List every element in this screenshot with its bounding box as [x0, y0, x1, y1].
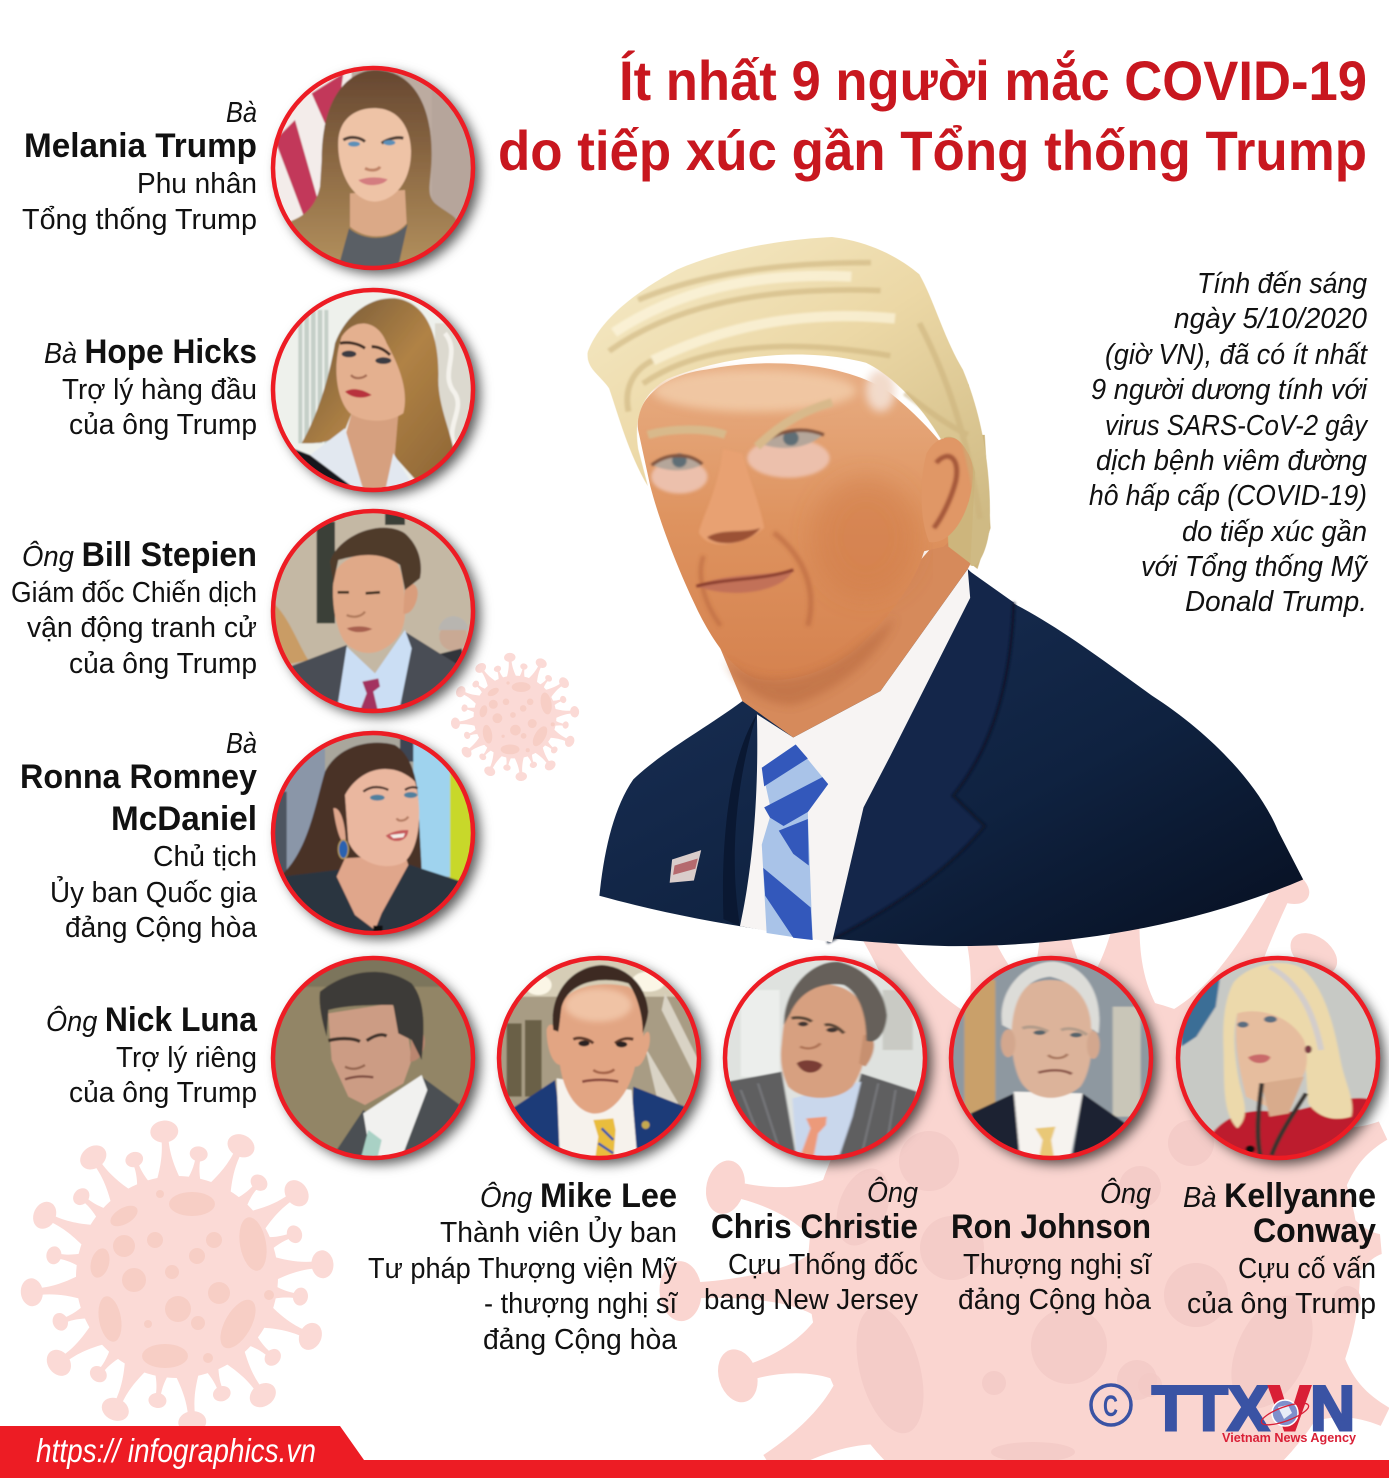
caption: Trợ lý hàng đầu	[62, 374, 257, 406]
caption: Bà Kellyanne	[1183, 1177, 1376, 1215]
caption	[704, 1175, 918, 1316]
virus: large background bottom right	[658, 849, 1389, 1478]
photo	[262, 728, 485, 948]
caption: Ông Nick Luna	[46, 1001, 258, 1039]
caption: Bà	[226, 97, 257, 129]
caption: Ông Mike Lee	[480, 1177, 677, 1215]
text block: intro paragraph: (giờ VN), đã có ít nhất	[1105, 339, 1369, 371]
caption: Trợ lý riêng	[116, 1042, 257, 1074]
caption: Ông	[1100, 1176, 1151, 1210]
text block: intro paragraph: dịch bệnh viêm đường	[1096, 445, 1367, 477]
caption	[11, 536, 257, 680]
photo	[258, 53, 488, 283]
person: Kellyanne Conway	[1166, 947, 1389, 1320]
caption: đảng Cộng hòa	[958, 1284, 1152, 1316]
caption	[44, 333, 257, 441]
caption: Ủy ban Quốc gia	[50, 875, 258, 909]
agency name: Vietnam News Agency	[1222, 1430, 1357, 1445]
person: Hope Hicks	[44, 283, 485, 503]
text block: intro paragraph: Donald Trump.	[1185, 586, 1367, 618]
caption: của ông Trump	[69, 1077, 257, 1109]
text block: intro paragraph: với Tổng thống Mỹ	[1141, 551, 1368, 583]
caption: Melania Trump	[24, 127, 257, 165]
photo	[492, 947, 712, 1170]
caption	[368, 1177, 679, 1356]
photo	[262, 502, 485, 725]
caption: Phu nhân	[137, 168, 257, 200]
caption: McDaniel	[111, 800, 257, 838]
wordmark: TTXVN	[1152, 1374, 1355, 1444]
caption: Bà	[226, 728, 257, 760]
photo	[1166, 947, 1389, 1170]
caption: của ông Trump	[1187, 1288, 1376, 1320]
text block: intro paragraph: hô hấp cấp (COVID-19)	[1089, 480, 1367, 512]
person: Ronna Romney McDaniel	[20, 728, 485, 948]
icon: globe	[1259, 1399, 1311, 1429]
caption: Cựu Thống đốc	[728, 1249, 918, 1281]
photo	[262, 947, 485, 1170]
text block: intro paragraph: 9 người dương tính với	[1091, 374, 1368, 406]
caption: Ron Johnson	[951, 1208, 1151, 1246]
facial shading	[648, 370, 919, 705]
caption: Ông Bill Stepien	[22, 536, 257, 574]
caption: Giám đốc Chiến dịch	[11, 577, 257, 609]
caption: Thành viên Ủy ban	[440, 1215, 677, 1249]
virus: small middle	[450, 652, 580, 782]
caption: Ronna Romney	[20, 758, 257, 796]
footer band	[0, 1426, 1389, 1478]
text block: intro paragraph	[1089, 268, 1369, 618]
person: Melania Trump	[22, 53, 488, 283]
caption: - thượng nghị sĩ	[484, 1288, 679, 1320]
caption: Conway	[1253, 1212, 1376, 1250]
text block: intro paragraph: do tiếp xúc gần	[1182, 516, 1367, 548]
caption: đảng Cộng hòa	[65, 912, 258, 944]
person: Mike Lee	[368, 947, 712, 1356]
person: Ron Johnson	[943, 947, 1158, 1316]
text block: intro paragraph: ngày 5/10/2020	[1174, 303, 1367, 335]
caption: Tư pháp Thượng viện Mỹ	[368, 1253, 677, 1285]
caption: Chris Christie	[711, 1208, 918, 1246]
hair behind ear	[944, 435, 991, 569]
virus spots on large virus	[827, 1090, 1361, 1462]
caption	[951, 1176, 1153, 1316]
person: Chris Christie	[704, 947, 939, 1316]
caption: Tổng thống Trump	[22, 204, 257, 236]
caption	[20, 728, 258, 944]
caption: Ông	[867, 1175, 918, 1209]
text block: intro paragraph: Tính đến sáng	[1197, 268, 1367, 300]
person: Nick Luna	[46, 947, 485, 1170]
caption: của ông Trump	[69, 409, 257, 441]
footer url: https:// infographics.vn	[36, 1432, 316, 1469]
caption	[22, 97, 257, 236]
virus: bottom left	[19, 1119, 335, 1435]
logo: TTXVN	[1091, 1374, 1357, 1445]
portrait: Donald Trump bust	[587, 237, 1303, 946]
caption: đảng Cộng hòa	[483, 1324, 678, 1356]
caption: vận động tranh cử	[27, 612, 257, 644]
caption: Bà Hope Hicks	[44, 333, 257, 371]
caption	[1183, 1177, 1376, 1320]
caption: Cựu cố vấn	[1238, 1253, 1376, 1285]
hair strands	[609, 263, 980, 519]
caption: bang New Jersey	[704, 1284, 918, 1316]
photo	[943, 947, 1158, 1170]
icon: copyright	[1091, 1385, 1131, 1425]
photo	[711, 947, 939, 1170]
caption	[46, 1001, 258, 1109]
caption: Chủ tịch	[153, 841, 257, 873]
caption: của ông Trump	[69, 648, 257, 680]
photo	[262, 283, 485, 503]
person: Bill Stepien	[11, 502, 485, 725]
title	[498, 49, 1367, 182]
icon: copyright: C	[1103, 1390, 1118, 1423]
caption: Thượng nghị sĩ	[963, 1249, 1153, 1281]
